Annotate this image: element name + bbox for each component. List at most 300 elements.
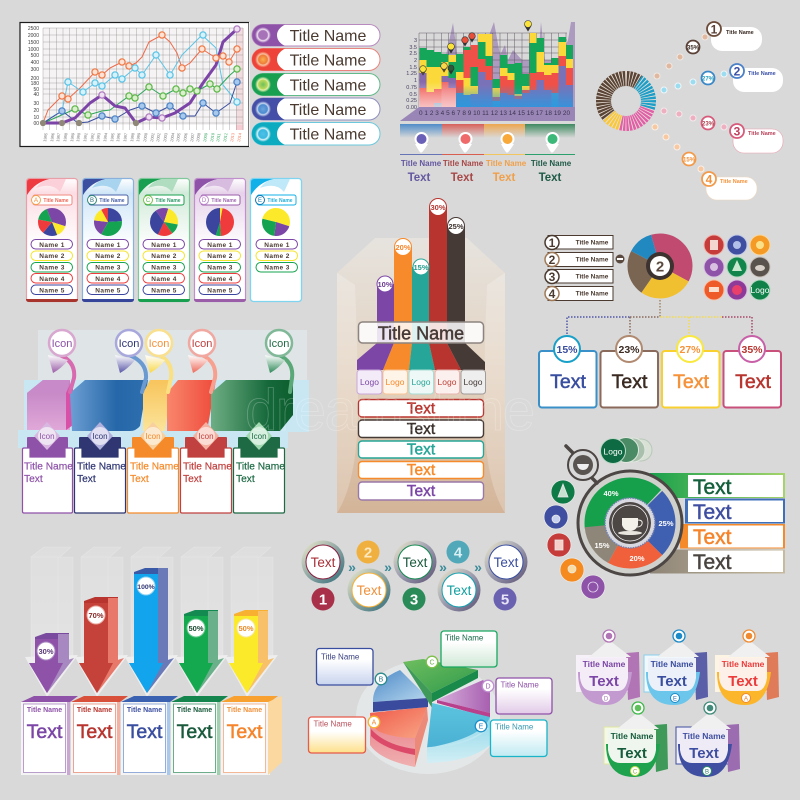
percent boxes [539, 336, 781, 408]
branch 4: 4 [706, 172, 713, 186]
wedge cyan [427, 703, 490, 763]
card D: Name 2 [207, 253, 233, 260]
legend labels: Title Name [486, 159, 527, 168]
y labels: 2 [414, 58, 417, 64]
card A: Name 1 [39, 242, 65, 249]
text bars [358, 400, 484, 500]
tag E: E [673, 696, 677, 702]
percent labels: 40% [603, 489, 619, 498]
card B: Name 4 [95, 276, 121, 283]
tag D: Text [589, 673, 619, 690]
logo boxes: Logo [412, 377, 431, 387]
ring sequence panel: Text [403, 555, 428, 570]
title cards: Title Name [24, 462, 73, 472]
y labels: 0.25 [406, 98, 417, 104]
legend pin purple [414, 132, 428, 153]
legend pin green [546, 132, 560, 153]
icon pins: Icon [119, 338, 139, 350]
y axis labels: 1000 [28, 47, 39, 53]
tag B: Text [689, 745, 719, 762]
percent badges: 20% [395, 243, 411, 252]
numbered list: 1 [549, 236, 556, 250]
arrow red 70% [75, 597, 128, 697]
card B [82, 178, 134, 302]
logo stack [600, 438, 652, 464]
x axis labels: 1995 [109, 132, 116, 142]
title cards: Text [24, 474, 43, 485]
legend labels [401, 159, 572, 184]
arrow purple 30%: 30% [38, 647, 54, 656]
logo stack: Logo [604, 446, 623, 456]
pie callouts: Title Name [314, 720, 352, 728]
bars behind ring [650, 473, 785, 574]
grid [419, 33, 567, 107]
chevrons: » [439, 559, 447, 575]
card A: Title Name [43, 198, 69, 204]
percent labels: 15% [594, 541, 610, 550]
legend labels: Title Name [531, 159, 572, 168]
x axis labels: 2008 [195, 132, 202, 142]
wedge green [403, 659, 478, 708]
numbered list: Title Name [576, 256, 609, 264]
branch 2: 2 [734, 64, 741, 78]
tag C: Text [617, 745, 647, 762]
wedge blue [373, 670, 428, 712]
x axis labels: 2005 [175, 132, 182, 142]
percent boxes: Text [735, 371, 771, 393]
y labels: 3 [414, 38, 417, 44]
card D: Name 3 [207, 265, 233, 272]
x axis labels: 2006 [182, 132, 189, 142]
y axis labels: 50 [33, 87, 39, 93]
card A: Name 2 [39, 253, 65, 260]
card D: Title Name [211, 198, 237, 204]
title cards: Icon [92, 432, 108, 441]
percent labels: 25% [658, 519, 674, 528]
tag A: Text [728, 673, 758, 690]
center donut [638, 244, 682, 288]
dotted connectors [567, 300, 752, 337]
x axis labels [42, 132, 243, 142]
percent badges: 15% [413, 263, 429, 272]
x labels: 0 1 2 3 4 5 6 7 8 9 10 11 12 13 14 15 16 17 18 19 20 [419, 110, 570, 117]
y axis labels: 2000 [28, 33, 39, 39]
y axis labels: 200 [31, 76, 39, 82]
legend labels: Title Name [401, 159, 442, 168]
y labels: 0.5 [409, 92, 417, 98]
branch 2 [661, 64, 783, 93]
branch 4: 15% [683, 158, 696, 164]
card D: Name 4 [207, 276, 233, 283]
branch 4 [652, 124, 757, 200]
title cards: Icon [251, 432, 267, 441]
card A [26, 178, 78, 302]
x axis labels: 1988 [62, 132, 69, 142]
y axis labels: 30 [33, 101, 39, 107]
tag E [644, 630, 708, 705]
y labels: 1 [414, 78, 417, 84]
tag C: Title Name [611, 731, 654, 741]
branch 1 [654, 22, 762, 79]
card B: Title Name [99, 198, 125, 204]
card C: Name 1 [151, 242, 177, 249]
x axis labels: 1996 [115, 132, 122, 142]
side icons [544, 480, 605, 599]
title cards [22, 422, 285, 513]
card A: Name 5 [39, 287, 65, 294]
drop tags panel [576, 630, 779, 777]
card C: C [146, 198, 151, 204]
card C [138, 178, 190, 302]
pie badges: A [372, 720, 377, 726]
card E: Name 3 [264, 265, 290, 272]
y labels: 0.75 [406, 85, 417, 91]
card B: Name 2 [95, 253, 121, 260]
y axis labels: 180 [31, 81, 39, 87]
tag B [676, 702, 740, 777]
x axis labels: 1986 [49, 132, 56, 142]
x axis labels: 1997 [122, 132, 129, 142]
axis base [400, 107, 575, 121]
base boxes: Text [177, 721, 213, 743]
numbered list: 3 [549, 270, 556, 284]
card E: Title Name [267, 198, 293, 204]
title box: Title Name [378, 324, 464, 344]
x axis labels: 1990 [75, 132, 82, 142]
y axis labels: 20 [33, 108, 39, 114]
icon pins [48, 330, 292, 392]
donut center number [646, 252, 674, 280]
base boxes: Text [27, 721, 63, 743]
tag D: D [604, 696, 609, 702]
title cards: Text [130, 474, 149, 485]
bars behind ring: Text [693, 551, 732, 574]
legend row 2: Title Name [290, 52, 366, 70]
x axis labels: 2001 [149, 132, 156, 142]
percent boxes: 35% [741, 344, 763, 356]
base boxes [21, 696, 282, 775]
pie callouts: Title Name [495, 722, 534, 732]
title cards: Title Name [77, 462, 126, 472]
numbered list [545, 236, 624, 301]
card D: Name 5 [207, 287, 233, 294]
card C: Title Name [155, 198, 181, 204]
title cards: Icon [39, 432, 55, 441]
text bars: Text [407, 462, 436, 479]
base boxes: Title Name [177, 707, 212, 714]
tag D [576, 630, 640, 705]
y axis labels: 1500 [28, 40, 39, 46]
branch 3: Title Name [748, 131, 776, 137]
base boxes: Title Name [227, 707, 262, 714]
y labels: 2.5 [409, 51, 417, 57]
y axis labels: 300 [31, 67, 39, 73]
card E: Name 1 [264, 242, 290, 249]
legend pin orange [500, 132, 514, 153]
stacked column chart panel [400, 20, 575, 184]
x axis labels: 2000 [142, 132, 149, 142]
branch 1: 35% [687, 46, 700, 52]
y axis labels: 2500 [28, 26, 39, 32]
card B: B [90, 198, 94, 204]
icon grid [704, 235, 770, 300]
column bars [357, 207, 485, 370]
y labels: 1.5 [409, 65, 417, 71]
x axis labels: 2003 [162, 132, 169, 142]
card B: Name 3 [95, 265, 121, 272]
logo boxes [357, 370, 486, 394]
tag E: Text [657, 673, 687, 690]
map pins [420, 20, 532, 75]
x axis labels: 2013 [229, 132, 236, 142]
logo boxes: Logo [438, 377, 457, 387]
card D [194, 178, 246, 302]
chevrons: » [348, 559, 356, 575]
watermark: dreamstime [245, 378, 535, 443]
x axis labels: 1998 [129, 132, 136, 142]
pie callouts: Title Name [500, 680, 539, 690]
y labels: 3.5 [409, 45, 417, 51]
x axis labels: 2012 [222, 132, 229, 142]
legend row 4: Title Name [290, 102, 366, 119]
pie badges: C [429, 660, 435, 666]
y labels: 1.25 [406, 71, 417, 77]
percent labels: 20% [629, 554, 645, 563]
wedge purple [437, 680, 490, 718]
text bars: Text [407, 483, 436, 500]
chart backdrop peaks [400, 22, 575, 121]
card D: D [202, 198, 207, 204]
ring sequence panel: Text [311, 555, 336, 570]
title name legend [252, 24, 380, 145]
x axis labels: 2009 [202, 132, 209, 142]
arrow green 50%: 50% [188, 624, 204, 633]
tag E: Title Name [651, 659, 694, 669]
numbered list: 4 [549, 287, 556, 301]
card E: Name 2 [264, 253, 290, 260]
pie callouts: Title Name [445, 634, 484, 642]
legend row 1: Title Name [290, 28, 366, 45]
donut with branches panel [604, 22, 783, 200]
line chart panel [20, 22, 250, 147]
base boxes: Text [77, 721, 113, 743]
y axis labels: 400 [31, 60, 39, 66]
base boxes: Text [227, 721, 263, 743]
number balls: 2 [364, 544, 372, 562]
branch 3 [661, 108, 783, 153]
number balls: 3 [410, 592, 418, 608]
card C: Name 3 [151, 265, 177, 272]
branch 2: 27% [702, 76, 715, 82]
card C: Name 4 [151, 276, 177, 283]
x axis labels: 1987 [55, 132, 62, 142]
logo boxes: Logo [464, 377, 483, 387]
icon pins: Icon [149, 338, 169, 350]
x axis labels: 2014 [236, 132, 243, 142]
percent boxes: 23% [618, 344, 640, 356]
title cards: Icon [198, 432, 214, 441]
tag A [715, 630, 779, 705]
x axis labels: 1991 [82, 132, 89, 142]
cube red [167, 380, 216, 431]
base boxes: Text [127, 721, 163, 743]
x axis labels: 1994 [102, 132, 109, 142]
tag B: Title Name [683, 731, 726, 741]
3D pie panel [308, 631, 552, 774]
arrow purple 30% [25, 633, 78, 697]
bars behind ring: Text [693, 501, 732, 524]
icon grid: Logo [751, 285, 770, 295]
donut center number: 2 [656, 258, 664, 276]
arrow yellow 50%: 50% [238, 624, 254, 633]
ring sequence panel: Text [357, 583, 382, 598]
percent badges: 10% [377, 280, 393, 289]
numbered list and donut panel [539, 235, 781, 408]
card A: Name 4 [39, 276, 65, 283]
percent boxes: Text [550, 371, 586, 393]
cube timeline panel [18, 330, 309, 513]
ghost columns [31, 547, 273, 657]
card E [250, 178, 302, 302]
title cards: Title Name [130, 462, 179, 472]
y axis labels: 00 [33, 121, 39, 127]
arrow blue 100%: 100% [137, 584, 155, 591]
tag A: Title Name [722, 659, 765, 669]
icon pins: Icon [192, 338, 212, 350]
chart markers [40, 26, 240, 125]
tag C: C [633, 770, 638, 776]
card B: Name 1 [95, 242, 121, 249]
percent badges [377, 198, 464, 292]
title cards: Text [77, 474, 96, 485]
legend labels: Title Name [443, 159, 484, 168]
ring sequence panel [302, 540, 528, 612]
numbered list: Title Name [576, 240, 609, 246]
y labels: 0.00 [406, 105, 417, 111]
magnifier icon [566, 446, 598, 483]
base boxes: Title Name [77, 707, 112, 714]
tag B: B [705, 770, 709, 776]
legend labels: Text [408, 172, 431, 184]
pie badges: D [485, 684, 491, 690]
tag C [604, 702, 668, 777]
chevrons [348, 559, 482, 575]
arrow blue 100% [125, 568, 178, 697]
card D: Name 1 [207, 242, 233, 249]
bars behind ring: Text [693, 476, 732, 499]
percent boxes: 15% [556, 344, 578, 356]
legend labels: Text [539, 172, 562, 184]
text bars: Text [407, 421, 436, 438]
percent boxes: 27% [679, 344, 701, 356]
x axis labels: 2004 [169, 132, 176, 142]
legend pin red [458, 132, 472, 153]
bars behind ring: Text [693, 526, 732, 549]
arrow green 50% [175, 610, 228, 697]
base boxes: Title Name [127, 707, 162, 714]
legend labels: Text [451, 172, 474, 184]
cube green [211, 380, 293, 431]
pie callouts: Title Name [321, 652, 360, 662]
title box [358, 322, 484, 344]
coffee cup center [605, 498, 655, 548]
numbered list: Title Name [576, 290, 609, 298]
title cards: Text [183, 474, 202, 485]
y axis labels: 10 [33, 115, 39, 121]
x axis labels: 2007 [189, 132, 196, 142]
card E: E [258, 198, 262, 204]
x axis labels: 1989 [69, 132, 76, 142]
text bars: Text [407, 442, 436, 458]
title cards: Title Name [236, 462, 285, 472]
title cards: Icon [145, 432, 161, 441]
card B: Name 5 [95, 287, 121, 294]
tag A: A [744, 696, 748, 702]
branch 3: 23% [702, 122, 715, 128]
card A: Name 3 [39, 265, 65, 272]
numbered list: 2 [549, 253, 556, 267]
x axis labels: 2011 [215, 132, 222, 142]
x axis labels: 1999 [135, 132, 142, 142]
icon pins: Icon [269, 338, 289, 350]
icon pins: Icon [52, 338, 72, 350]
legend row 3: Title Name [290, 78, 366, 94]
x axis labels: 1992 [89, 132, 96, 142]
x axis labels: 2010 [209, 132, 216, 142]
cube blue [70, 380, 148, 431]
percent boxes: Text [612, 371, 648, 393]
card C: Name 5 [151, 287, 177, 294]
y labels [406, 38, 417, 111]
x axis labels: 1985 [42, 132, 49, 142]
percent boxes: Text [673, 371, 709, 393]
y axis labels: 40 [33, 92, 39, 98]
card C: Name 2 [151, 253, 177, 260]
percent badges: 30% [430, 203, 446, 212]
arrow red 70%: 70% [88, 611, 104, 620]
branch 1: Title Name [726, 30, 754, 36]
percent badges: 25% [448, 222, 464, 231]
wedge red [370, 707, 428, 767]
arrows panel [21, 547, 282, 775]
pie callouts [308, 631, 552, 756]
center column panel [337, 198, 505, 513]
percent labels [594, 489, 674, 563]
branch 1: 1 [711, 22, 718, 36]
title cards: Title Name [183, 462, 232, 472]
arrow yellow 50% [225, 610, 278, 697]
legend row 5: Title Name [290, 126, 366, 144]
branch 4: Title Name [720, 179, 748, 185]
base boxes: Title Name [27, 707, 62, 714]
branch 2: Title Name [748, 71, 776, 77]
tag D: Title Name [583, 659, 626, 669]
stacked columns [419, 33, 573, 107]
x axis labels: 2002 [155, 132, 162, 142]
pie badges: B [379, 676, 384, 684]
legend strips [400, 124, 575, 155]
pie badges [368, 656, 494, 732]
number balls [312, 540, 516, 610]
pie cards panel [26, 178, 302, 302]
number balls: 5 [501, 592, 509, 608]
text bars: Text [407, 400, 436, 418]
ring pie [595, 488, 665, 558]
coffee ring panel [544, 438, 785, 599]
chevrons: » [384, 559, 392, 575]
pie badges: E [479, 724, 484, 730]
branch 3: 3 [734, 124, 741, 138]
